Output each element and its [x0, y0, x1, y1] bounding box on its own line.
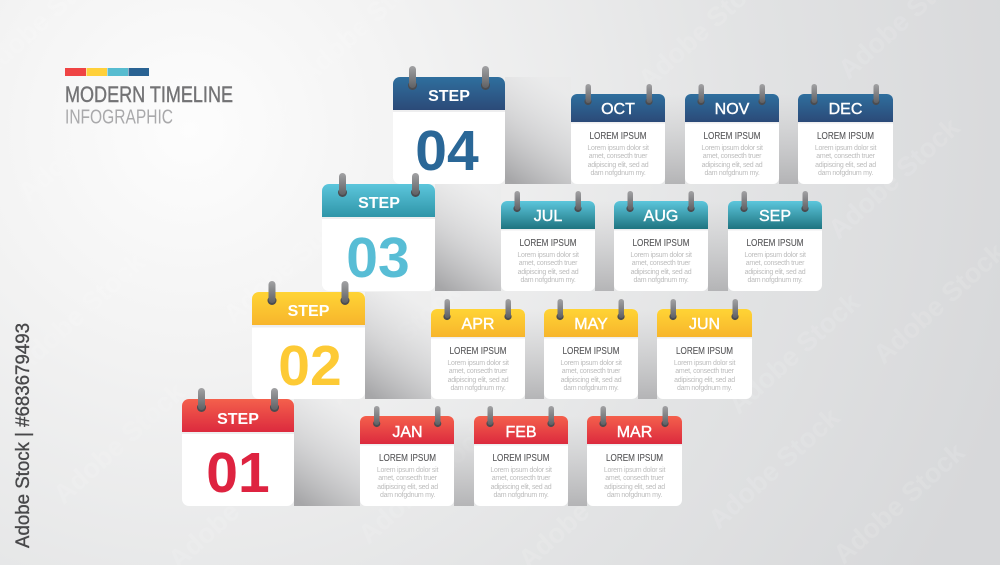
panel: apr: dam nofgdnum my. [450, 385, 506, 392]
panel: nov: Lorem ipsum dolor sit [701, 145, 763, 152]
panel: dec [798, 84, 893, 184]
panel: step 02 [252, 281, 365, 399]
watermark pattern: Adobe Stock [353, 416, 496, 550]
watermark pattern: Adobe Stock [323, 276, 466, 410]
panel: jun: adipiscing elit, sed ad [674, 377, 735, 384]
panel: apr: Lorem ipsum dolor sit [447, 360, 509, 367]
watermark pattern: Adobe Stock [218, 196, 361, 330]
watermark pattern: Adobe Stock [703, 401, 846, 535]
colour swatch bar [65, 68, 149, 76]
panel: mar: Lorem ipsum dolor sit [604, 467, 665, 474]
panel: step 03 [322, 173, 435, 291]
watermark pattern: Adobe Stock [823, 111, 966, 245]
panel: may: Lorem ipsum dolor sit [560, 360, 622, 367]
panel: feb: adipiscing elit, sed ad [491, 484, 552, 491]
panel: aug: adipiscing elit, sed ad [631, 269, 692, 276]
panel: mar: LOREM IPSUM [606, 453, 663, 464]
panel: dec: DEC [829, 101, 862, 118]
panel: jun: LOREM IPSUM [676, 346, 733, 357]
panel: jan: dam nofgdnum my. [380, 492, 435, 499]
panel: jul: amet, consecth truer [519, 260, 578, 267]
panel: oct [571, 84, 665, 184]
panel: aug: amet, consecth truer [632, 260, 691, 267]
panel: oct: OCT [601, 101, 635, 118]
panel: step 01 [182, 388, 294, 506]
panel: dec: LOREM IPSUM [817, 131, 874, 142]
panel: jan: LOREM IPSUM [379, 453, 436, 464]
panel: mar: MAR [617, 424, 652, 441]
panel: may: MAY [574, 316, 608, 333]
title block [65, 68, 233, 128]
panel: step 03: 03 [346, 226, 410, 290]
panel: oct: Lorem ipsum dolor sit [587, 145, 649, 152]
panel: may: amet, consecth truer [562, 368, 621, 375]
panel: may: dam nofgdnum my. [563, 385, 619, 392]
panel: step 03: STEP [358, 195, 400, 212]
panel: apr [431, 299, 525, 399]
panel: aug: LOREM IPSUM [632, 238, 690, 249]
panel: aug: AUG [644, 208, 678, 225]
panel: jun: dam nofgdnum my. [677, 385, 732, 392]
watermark pattern: Adobe Stock [8, 246, 151, 380]
panel: feb: Lorem ipsum dolor sit [490, 467, 552, 474]
panel: step 01: STEP [217, 411, 259, 428]
panel: apr: adipiscing elit, sed ad [448, 377, 509, 384]
panel: oct: adipiscing elit, sed ad [588, 162, 649, 169]
panel: dec: Lorem ipsum dolor sit [815, 145, 876, 152]
panel: dec: adipiscing elit, sed ad [815, 162, 876, 169]
panel: jul: LOREM IPSUM [520, 238, 576, 249]
panel: feb: amet, consecth truer [492, 475, 551, 482]
panel: may [544, 299, 638, 399]
panel: feb: LOREM IPSUM [492, 453, 550, 464]
panel: apr: LOREM IPSUM [450, 346, 506, 357]
panel: feb: FEB [505, 424, 537, 441]
panel: jul: dam nofgdnum my. [520, 277, 576, 284]
panel: jan: adipiscing elit, sed ad [377, 484, 438, 491]
panel: sep: SEP [759, 208, 791, 225]
watermark pattern: Adobe Stock [723, 286, 866, 420]
title: MODERN TIMELINE [65, 82, 233, 107]
panel: sep: adipiscing elit, sed ad [745, 269, 806, 276]
panel: oct: LOREM IPSUM [590, 131, 646, 142]
panel: jan [360, 406, 454, 506]
panel: jul: JUL [534, 208, 562, 225]
panel: oct: amet, consecth truer [589, 153, 648, 160]
panel: mar: dam nofgdnum my. [607, 492, 662, 499]
panel: may: LOREM IPSUM [562, 346, 620, 357]
panel: dec: amet, consecth truer [816, 153, 876, 160]
panel: jan: JAN [392, 424, 423, 441]
panel: feb [474, 406, 568, 506]
watermark pattern: Adobe Stock [160, 93, 303, 227]
stock id side label: Adobe Stock | #683679493 [13, 323, 34, 548]
panel: jun: amet, consecth truer [675, 368, 735, 375]
panel: step 01: 01 [206, 441, 270, 505]
panel: aug: dam nofgdnum my. [633, 277, 689, 284]
panel: aug: Lorem ipsum dolor sit [630, 252, 692, 259]
panel: nov [685, 84, 779, 184]
panel: jun [657, 299, 752, 399]
watermark pattern: Adobe Stock [48, 376, 191, 510]
watermark pattern: Adobe Stock [13, 74, 156, 208]
panel: step 04: STEP [428, 88, 470, 105]
panel: may: adipiscing elit, sed ad [561, 377, 622, 384]
panel: sep: LOREM IPSUM [746, 238, 804, 249]
panel: nov: adipiscing elit, sed ad [702, 162, 763, 169]
panel: jan: amet, consecth truer [378, 475, 438, 482]
panel: jul: adipiscing elit, sed ad [518, 269, 579, 276]
panel: nov: dam nofgdnum my. [704, 170, 760, 177]
panel: jun: JUN [689, 316, 720, 333]
panel: step 04: 04 [415, 119, 479, 183]
panel: oct: dam nofgdnum my. [590, 170, 646, 177]
panel: aug [614, 191, 708, 291]
panel: sep [728, 191, 822, 291]
panel: apr: APR [462, 316, 494, 333]
panel: jan: Lorem ipsum dolor sit [377, 467, 438, 474]
panel: step 02: 02 [278, 334, 342, 398]
panel: step 04 [393, 66, 505, 184]
panel: step 02: STEP [288, 303, 330, 320]
panel: jul [501, 191, 595, 291]
panel: jun: Lorem ipsum dolor sit [674, 360, 735, 367]
panel: mar: adipiscing elit, sed ad [604, 484, 665, 491]
panel: nov: amet, consecth truer [703, 153, 762, 160]
panel: mar: amet, consecth truer [605, 475, 665, 482]
panel: dec: dam nofgdnum my. [818, 170, 873, 177]
panel: jul: Lorem ipsum dolor sit [517, 252, 579, 259]
row shadows [294, 77, 798, 506]
panel: nov: NOV [715, 101, 750, 118]
panel: apr: amet, consecth truer [449, 368, 508, 375]
panel: mar [587, 406, 682, 506]
subtitle: INFOGRAPHIC [65, 106, 173, 128]
panel: feb: dam nofgdnum my. [493, 492, 549, 499]
panel: sep: Lorem ipsum dolor sit [744, 252, 806, 259]
panel: sep: dam nofgdnum my. [747, 277, 803, 284]
panel: sep: amet, consecth truer [746, 260, 805, 267]
panel: nov: LOREM IPSUM [704, 131, 760, 142]
